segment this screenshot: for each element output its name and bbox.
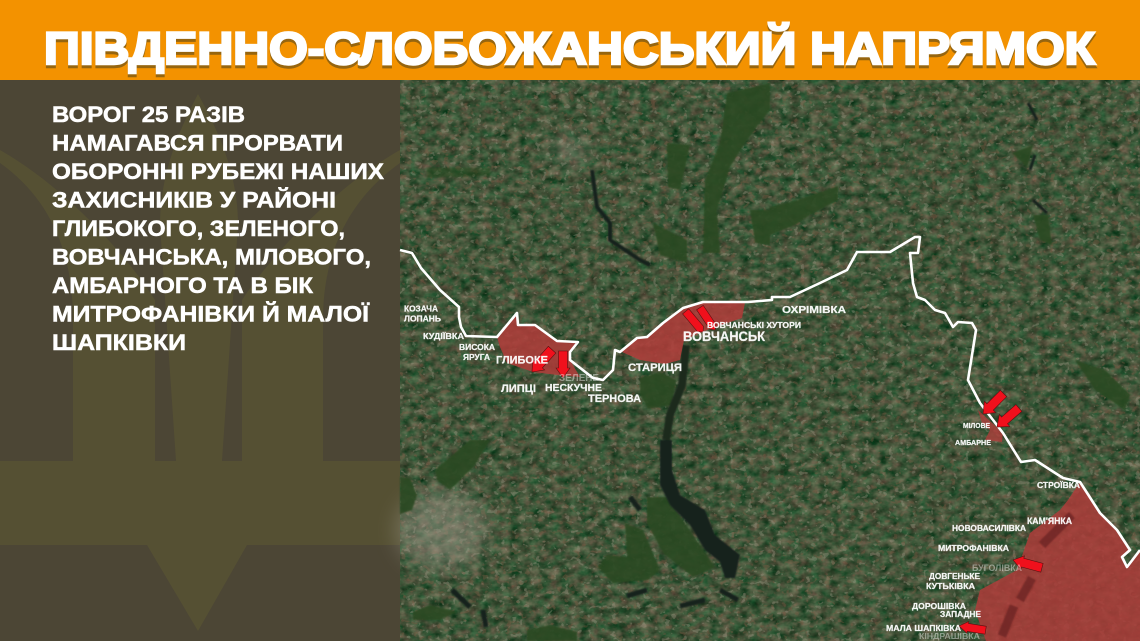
place labels: ЯРУГА	[463, 353, 490, 362]
text block: enemy attempts summary: ШАПКІВКИ	[52, 330, 186, 355]
place labels: СТРОЇВКА	[1037, 480, 1080, 490]
place labels: ТЕРНОВА	[588, 393, 641, 405]
icon: trident watermark	[0, 94, 400, 631]
place labels: ВОВЧАНСЬКІ ХУТОРИ	[707, 320, 801, 330]
text block: enemy attempts summary: НАМАГАВСЯ ПРОРВАТИ	[52, 130, 343, 156]
place labels: КІНДРАШІВКА	[919, 631, 980, 641]
occupied area: Milove	[978, 410, 1003, 442]
occupied area: Vovchansk	[622, 302, 745, 364]
place labels: ДОРОШІВКА	[912, 601, 966, 611]
text block: enemy attempts summary	[52, 102, 384, 355]
rivers and reservoirs	[452, 103, 1047, 627]
place labels: КУТЬКІВКА	[926, 581, 975, 591]
panel: satellite map	[397, 80, 1140, 641]
place labels: ОХРІМІВКА	[782, 304, 846, 316]
arrow: Milove north	[977, 388, 1009, 420]
forests	[400, 83, 1130, 641]
place labels: ЛИПЦІ	[501, 383, 536, 395]
place labels: НЕСКУЧНЕ	[545, 382, 602, 394]
text block: enemy attempts summary: ЗАХИСНИКІВ У РАЙОНІ	[52, 188, 336, 212]
urban areas	[397, 138, 588, 570]
arrow: Vovchansk east	[697, 305, 718, 332]
front line	[400, 237, 1140, 567]
place labels: ДОВГЕНЬКЕ	[929, 571, 980, 581]
place labels	[404, 304, 1080, 641]
panel: left text panel	[0, 80, 400, 641]
arrow: Zelene	[556, 351, 570, 378]
place labels: БУГОЛІВКА	[972, 563, 1022, 573]
text block: enemy attempts summary: ВОВЧАНСЬКА, МІЛОВОГО,	[52, 244, 371, 270]
place labels: МИТРОФАНІВКА	[938, 543, 1009, 553]
occupied area: Hlyboke	[497, 313, 580, 377]
arrow: Mytrofanivka	[1011, 553, 1044, 575]
text block: enemy attempts summary: ГЛИБОКОГО, ЗЕЛЕНОГО,	[52, 216, 345, 241]
text block: enemy attempts summary: ВОРОГ 25 РАЗІВ	[52, 102, 245, 127]
place labels: МІЛОВЕ	[963, 421, 990, 430]
place labels: ЗАПАДНЕ	[940, 609, 981, 619]
place labels: ВИСОКА	[459, 343, 495, 352]
arrow: Vovchansk west	[683, 309, 706, 335]
text block: enemy attempts summary: ОБОРОННІ РУБЕЖІ НАШИХ	[52, 159, 384, 184]
place labels: КУДІЇВКА	[423, 332, 464, 341]
place labels: КАМ'ЯНКА	[1027, 516, 1072, 526]
arrow: Mala Shapkivka	[958, 620, 987, 636]
place labels: АМБАРНЕ	[955, 438, 991, 447]
header banner	[0, 0, 1140, 80]
occupied area: south-east	[975, 482, 1140, 641]
place labels: ВОВЧАНСЬК	[683, 328, 765, 344]
arrow: Milove south	[992, 402, 1024, 433]
title: ПІВДЕННО-СЛОБОЖАНСЬКИЙ НАПРЯМОК	[44, 23, 1096, 74]
place labels: СТАРИЦЯ	[628, 362, 682, 374]
place labels: ЛОПАНЬ	[404, 315, 441, 324]
place labels: МАЛА ШАПКІВКА	[886, 623, 961, 633]
place labels: ЗЕЛЕНЕ	[559, 373, 599, 384]
text block: enemy attempts summary: АМБАРНОГО ТА В БІК	[52, 273, 314, 298]
arrow: Hlyboke	[526, 344, 558, 377]
place labels: КОЗАЧА	[404, 305, 438, 314]
place labels: ГЛИБОКЕ	[496, 354, 548, 366]
text block: enemy attempts summary: МИТРОФАНІВКИ Й МАЛОЇ	[52, 302, 370, 326]
place labels: НОВОВАСИЛІВКА	[952, 523, 1026, 533]
